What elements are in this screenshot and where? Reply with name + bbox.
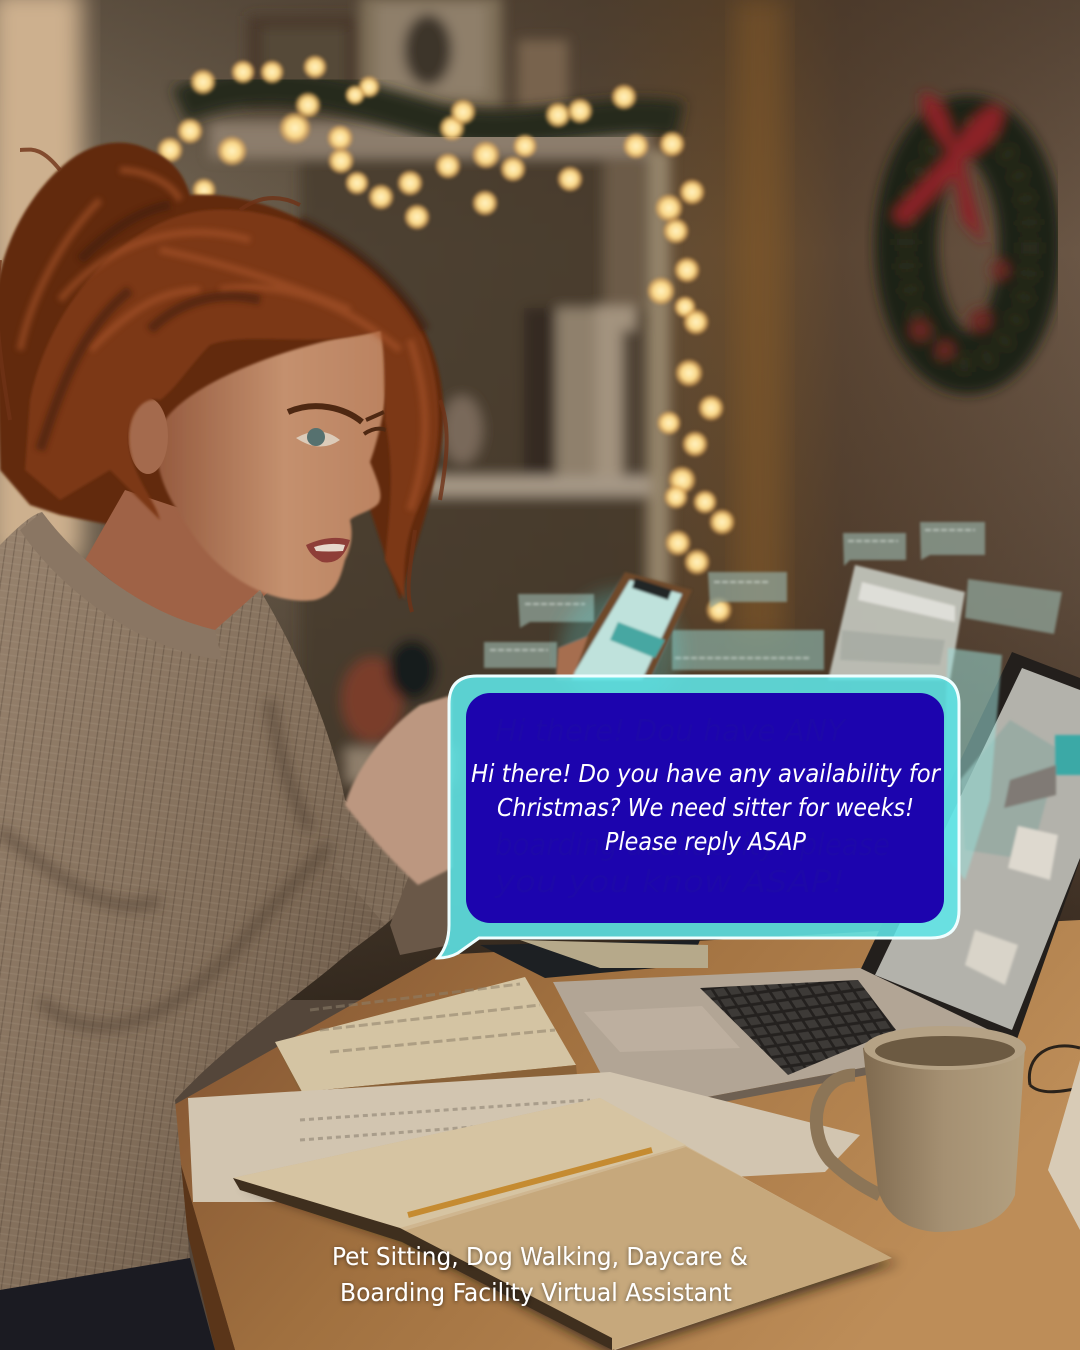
phone	[556, 572, 692, 710]
face	[157, 330, 388, 601]
laptop screen	[858, 652, 1080, 1042]
faint ghost text: you you know ASAP!	[494, 865, 845, 900]
neck	[85, 490, 270, 655]
laptop base	[553, 968, 1010, 1105]
desk	[165, 920, 1080, 1350]
floating message bubbles	[484, 522, 1062, 880]
wreath	[892, 92, 1030, 363]
hair back	[0, 143, 444, 600]
message text: Please reply ASAP	[605, 827, 806, 856]
sweater	[0, 512, 415, 1290]
second sleeve	[390, 855, 450, 955]
message bubble frame	[438, 676, 959, 958]
eyes and brow	[288, 406, 386, 447]
footer caption	[332, 1242, 748, 1307]
faint ghost text	[494, 714, 890, 900]
open notebook with pencil	[233, 1098, 900, 1350]
collar	[20, 512, 222, 660]
footer caption: Pet Sitting, Dog Walking, Daycare &	[332, 1242, 748, 1271]
mouth	[306, 538, 350, 563]
screen panels	[960, 720, 1080, 985]
fairy lights	[156, 54, 736, 624]
faint ghost text: Hi there! Dou have ANY	[495, 714, 848, 749]
woman	[0, 143, 452, 1350]
garland	[180, 88, 680, 128]
loose papers	[188, 1072, 860, 1202]
upper notebook on desk	[275, 940, 708, 1093]
laptop	[553, 652, 1080, 1113]
picture frames on wall	[248, 0, 568, 110]
message text: Hi there! Do you have any availability for	[471, 759, 942, 788]
bookshelf	[210, 122, 670, 784]
dark lap	[0, 1258, 215, 1350]
faint ghost text: boarding availability? please	[495, 828, 890, 863]
hair front	[25, 210, 438, 600]
coffee mug	[816, 1026, 1080, 1232]
ear	[128, 398, 168, 474]
background wall	[0, 0, 1080, 1000]
message text	[471, 759, 942, 856]
hand	[345, 695, 452, 885]
message panel	[466, 693, 944, 923]
sleeve cuff	[320, 805, 418, 925]
footer caption: Boarding Facility Virtual Assistant	[340, 1278, 732, 1307]
message text: Christmas? We need sitter for weeks!	[497, 793, 914, 822]
